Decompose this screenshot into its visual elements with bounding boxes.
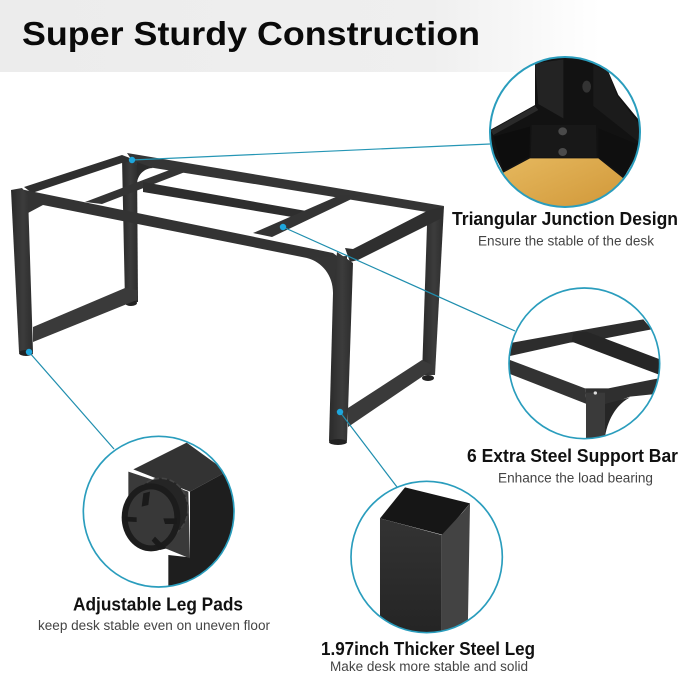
callout circle: adjustable leg pad (83, 436, 240, 590)
rear bar (508, 319, 652, 356)
rear corner gusset (137, 162, 153, 183)
steel junction (490, 57, 642, 178)
label: support bar: 6 Extra Steel Support Bar (467, 446, 678, 466)
leg side face (168, 474, 234, 586)
label: steel leg: Make desk more stable and solid (330, 659, 528, 674)
front right leg (329, 252, 353, 441)
side top rails (24, 155, 444, 262)
support bars (85, 166, 360, 237)
label: steel leg (321, 639, 535, 674)
label: leg pads: Adjustable Leg Pads (73, 594, 243, 614)
leg (586, 393, 605, 440)
mounting plate (128, 472, 190, 558)
lower stretchers (33, 288, 434, 427)
rear top rail (127, 153, 444, 212)
title band (0, 0, 600, 72)
leg opening (380, 487, 470, 535)
cross bar (573, 338, 659, 374)
leg top face (133, 443, 227, 492)
label: leg pads (38, 594, 270, 633)
callout circle: thicker steel leg (351, 481, 502, 637)
front rail (508, 359, 587, 404)
gusset (605, 397, 630, 437)
wood top (501, 158, 623, 206)
callout circle: support bars (508, 288, 662, 440)
rear legs (122, 158, 444, 381)
adjuster knob (122, 478, 188, 551)
title: Super Sturdy Construction (22, 15, 480, 52)
leg front face (380, 518, 442, 637)
leg pads (19, 350, 347, 445)
leader line: junction (129, 144, 490, 163)
label: support bar (467, 446, 678, 486)
label: triangular junction: Triangular Junction Design (452, 209, 678, 229)
label: triangular junction: Ensure the stable of the desk (478, 234, 654, 248)
front gusset (307, 256, 347, 293)
leader line: leg pad (26, 349, 114, 449)
label: triangular junction (452, 209, 678, 248)
desk frame (11, 153, 444, 445)
leader line: thick leg (337, 409, 397, 487)
callout circle: triangular junction (490, 57, 642, 213)
label: leg pads: keep desk stable even on uneven floor (38, 618, 270, 633)
leg side face (442, 503, 470, 637)
corner rail (585, 378, 658, 404)
label: steel leg: 1.97inch Thicker Steel Leg (321, 639, 535, 659)
bolts (558, 81, 591, 156)
front top rail (20, 189, 345, 262)
leader line: support bar (280, 224, 515, 331)
front left leg (11, 188, 33, 352)
label: support bar: Enhance the load bearing (498, 470, 653, 486)
